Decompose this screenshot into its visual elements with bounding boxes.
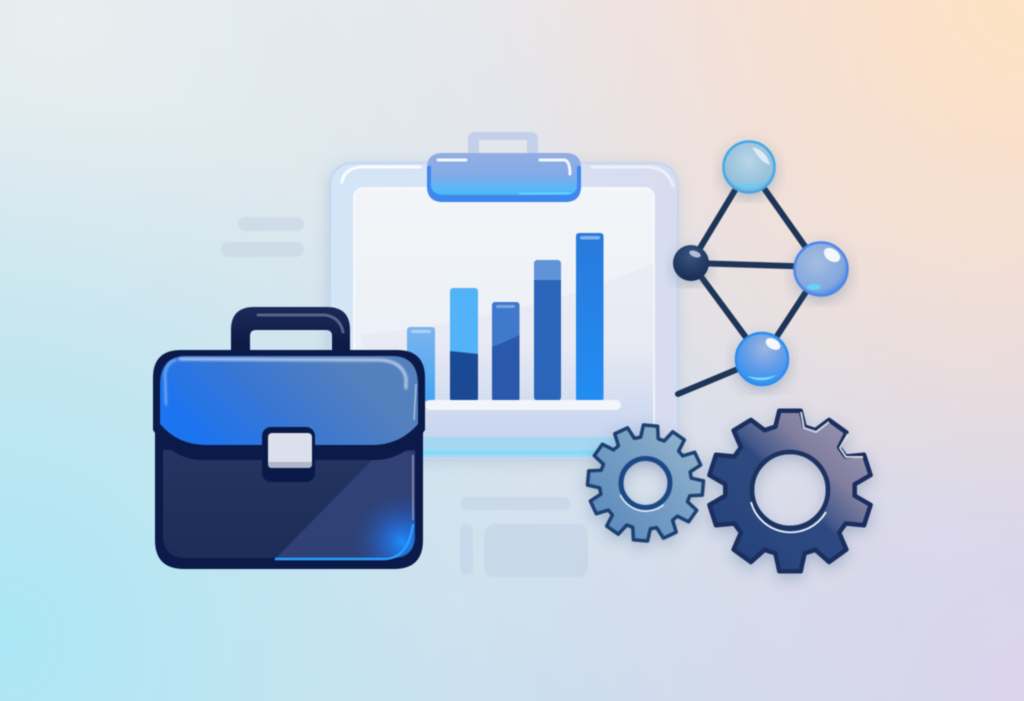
clip body <box>427 153 581 202</box>
gears <box>583 411 871 571</box>
bar chart <box>407 233 621 410</box>
clipboard with bar chart <box>330 132 678 458</box>
briefcase body <box>155 420 423 569</box>
bar 4 <box>534 260 561 401</box>
clipboard frame <box>330 163 678 458</box>
bar 2 <box>450 288 478 401</box>
bottom strip of clipboard <box>400 437 615 457</box>
large gear <box>709 411 871 571</box>
node: bottom <box>736 333 788 385</box>
faint text placeholder lines, left <box>221 217 304 257</box>
clip handle <box>468 132 538 160</box>
network diagram <box>673 142 848 394</box>
bar 5 <box>576 233 604 401</box>
chart baseline shelf <box>425 400 621 410</box>
node: right <box>794 242 848 296</box>
translucent reflection on clipboard <box>360 263 654 437</box>
node: top <box>724 142 774 192</box>
bar 3 <box>492 302 520 401</box>
small gear <box>583 421 708 545</box>
briefcase handle <box>231 307 350 356</box>
node: dark hub <box>673 245 709 281</box>
faint content placeholders, below clipboard <box>460 497 588 577</box>
body reflection <box>276 452 415 558</box>
briefcase flap <box>153 350 425 460</box>
clipboard clip <box>427 132 581 202</box>
bar 1 <box>407 327 435 401</box>
briefcase <box>153 307 425 569</box>
clipboard paper <box>354 188 654 438</box>
briefcase clasp <box>262 427 315 482</box>
network connecting lines <box>678 167 821 394</box>
